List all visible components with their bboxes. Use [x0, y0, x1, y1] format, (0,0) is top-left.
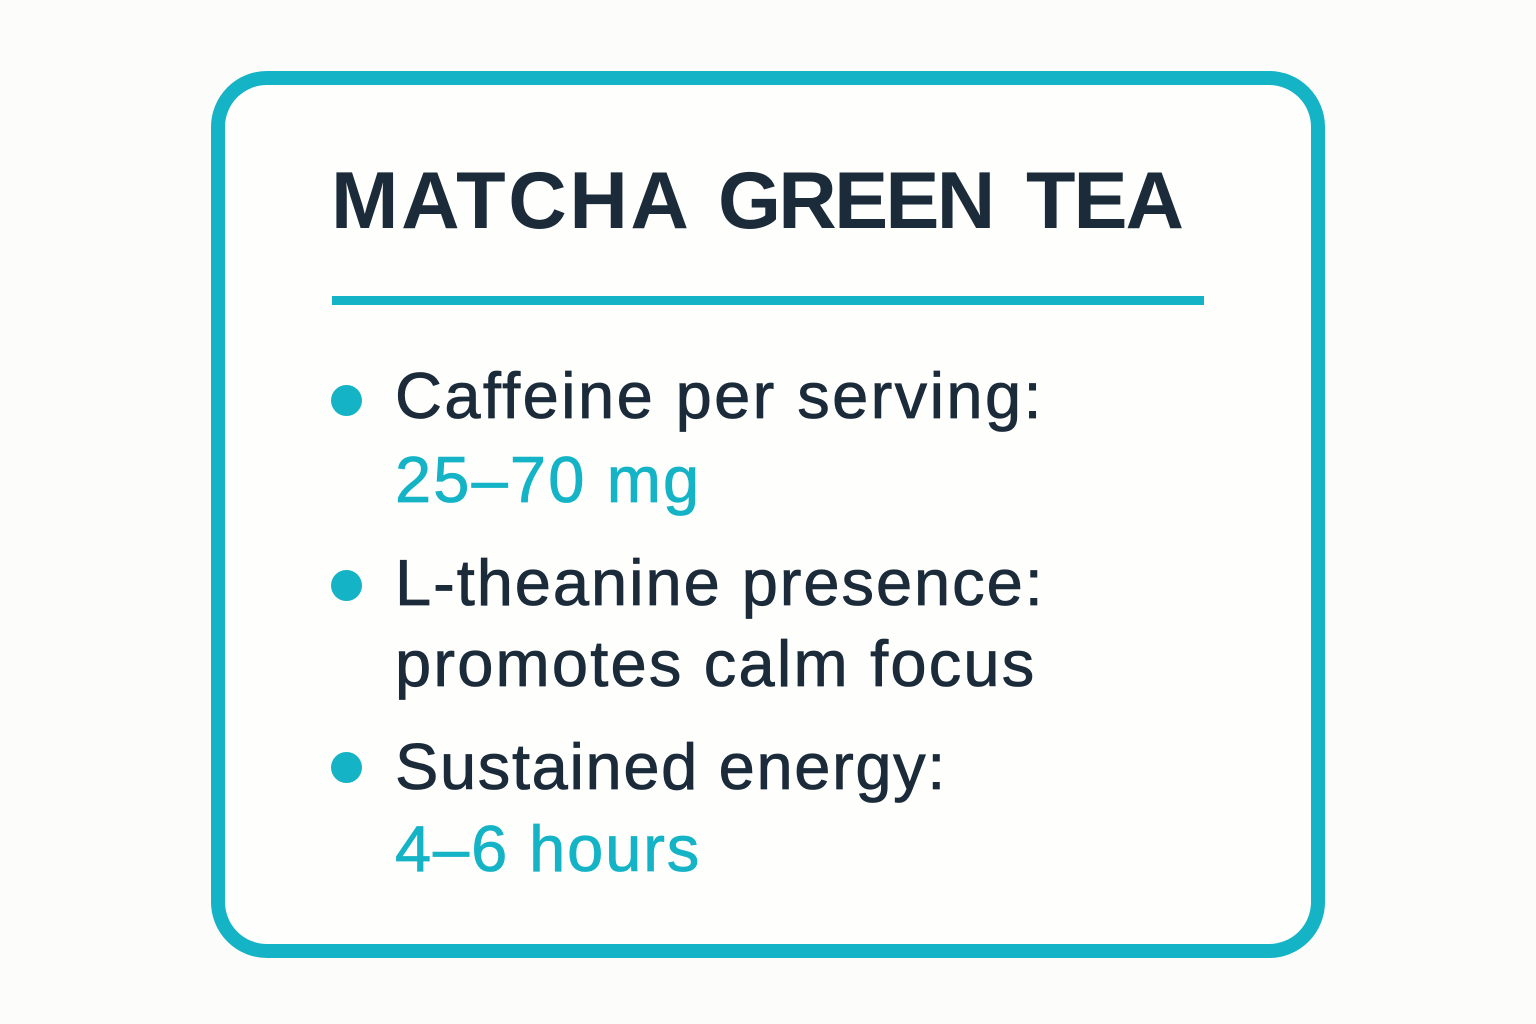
title: [331, 156, 1182, 246]
text: l-theanine detail: promotes calm focus: [395, 627, 1036, 700]
divider rule: [332, 296, 1204, 305]
bullet: caffeine: [331, 385, 362, 416]
text: caffeine label: Caffeine per serving:: [395, 359, 1044, 432]
bullet: energy: [331, 752, 362, 783]
text: l-theanine label: L-theanine presence:: [395, 546, 1045, 619]
text: energy value: 4–6 hours: [395, 812, 701, 885]
title: TEA: [1026, 156, 1182, 246]
text: energy label: Sustained energy:: [395, 730, 947, 803]
text: caffeine value: 25–70 mg: [395, 443, 701, 516]
title: GREEN: [718, 156, 993, 246]
title: MATCHA: [331, 156, 692, 246]
panel: matcha card: [211, 71, 1325, 958]
bullet: l-theanine: [331, 570, 362, 601]
